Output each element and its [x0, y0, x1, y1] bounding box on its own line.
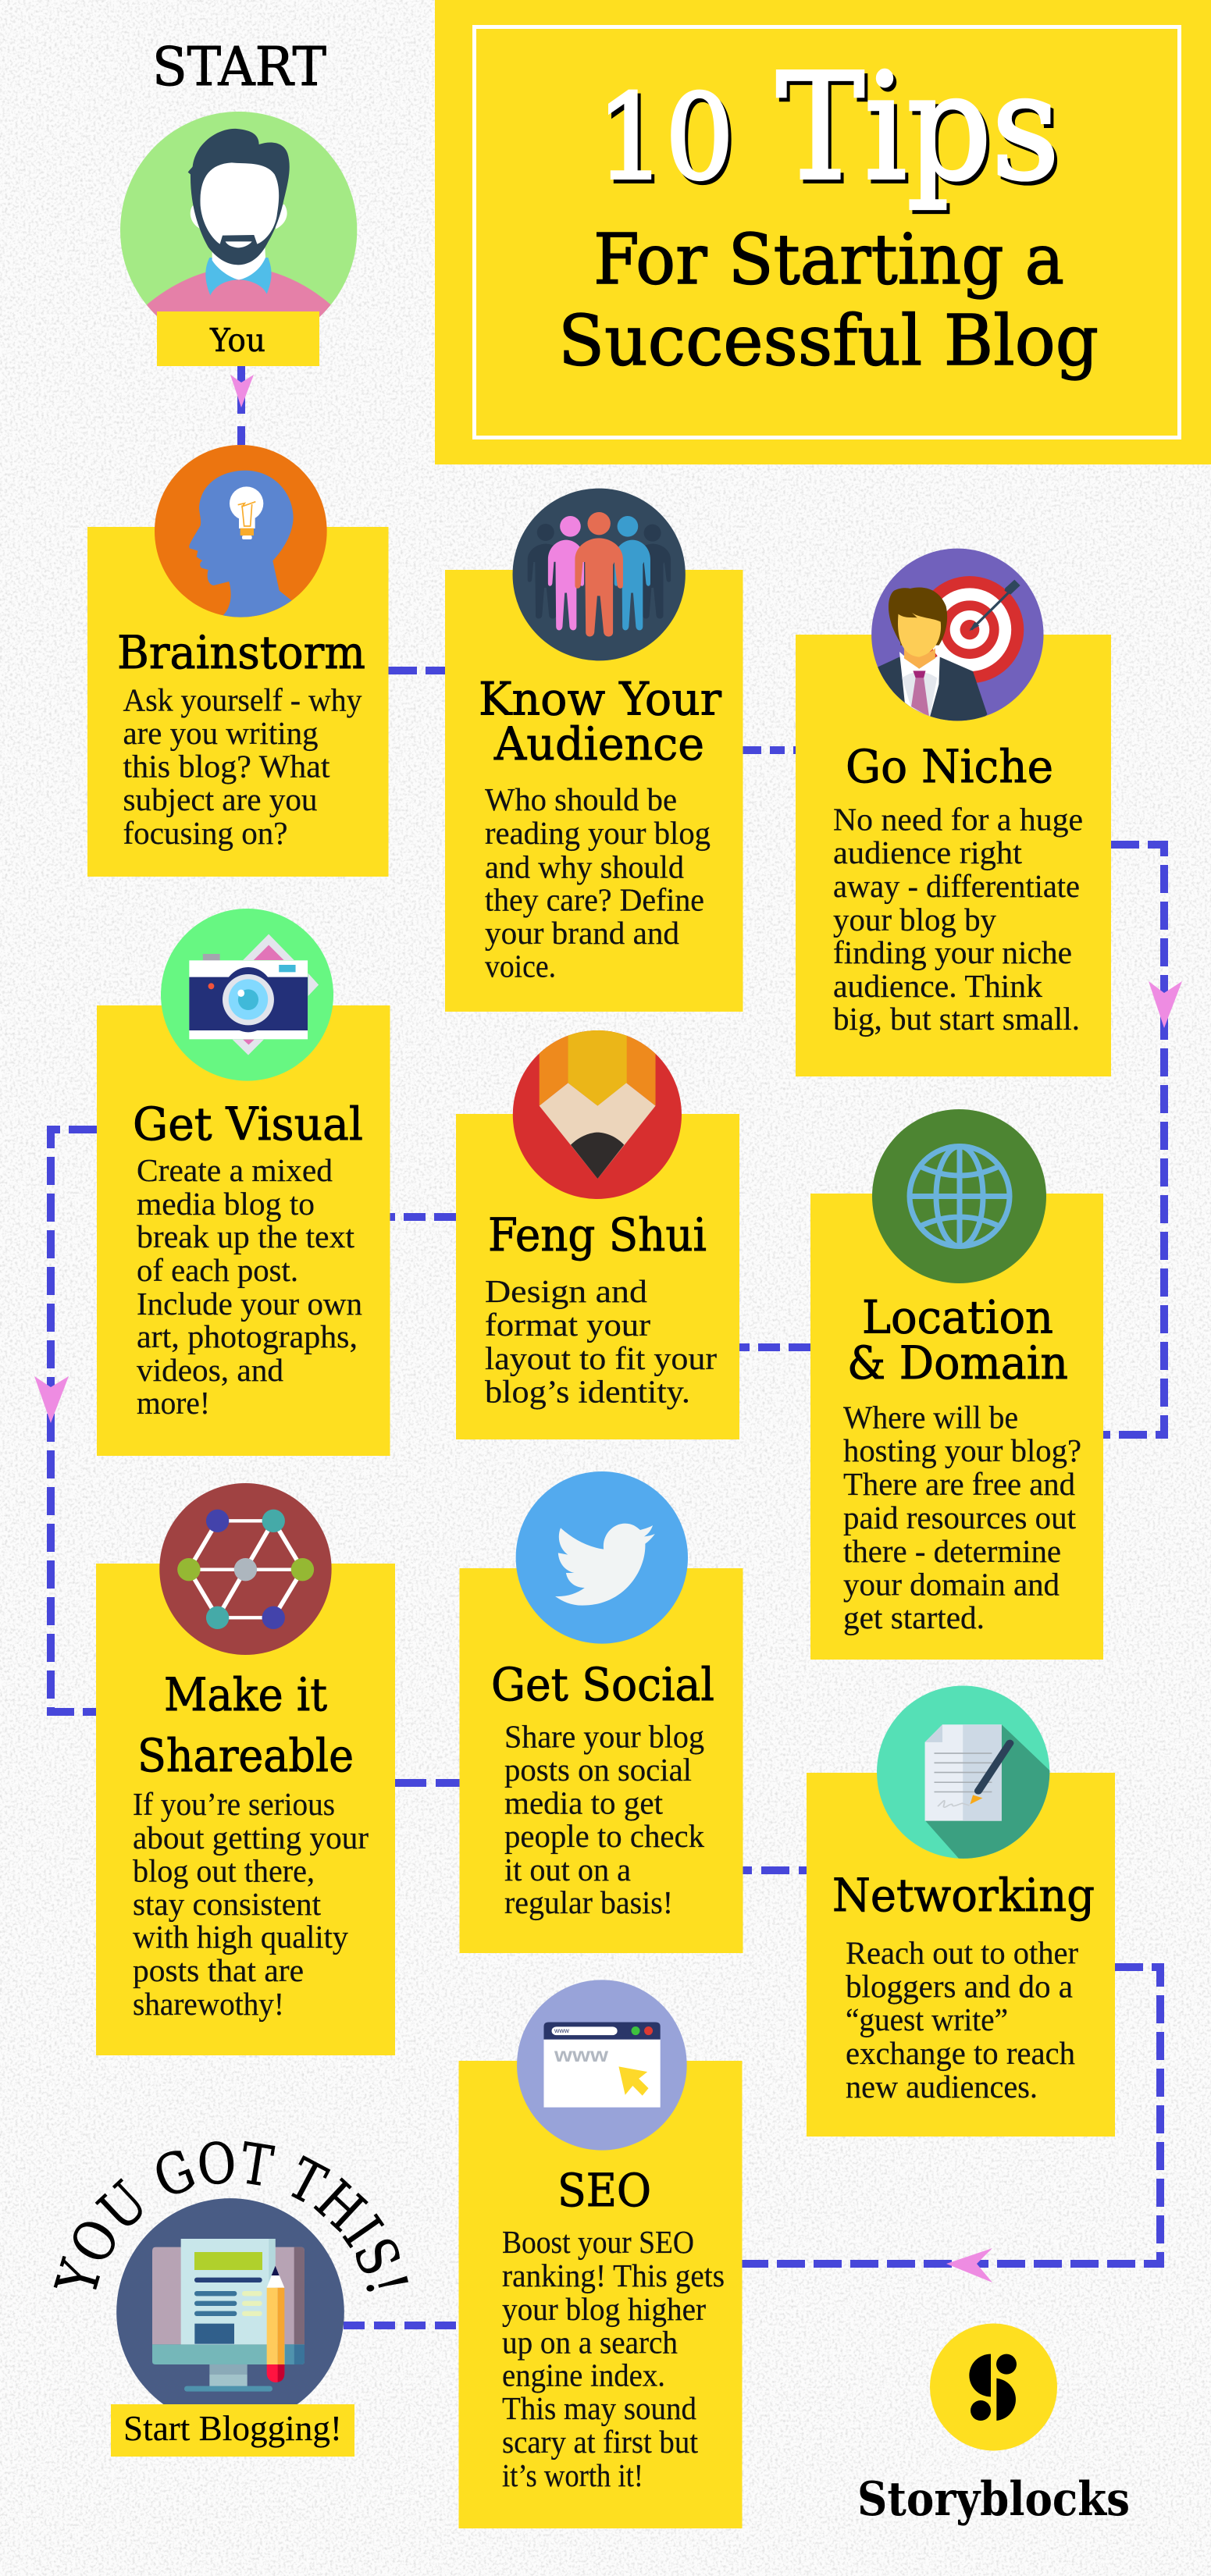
text: Shareable body: stay consistent: [133, 1886, 322, 1922]
title: 10 Tips: Tips: [776, 42, 1060, 213]
text: SEO body: your blog higher: [502, 2291, 706, 2327]
heading: Get Visual: Get Visual: [133, 1098, 363, 1151]
label box: Start Blogging: Start Blogging!: [123, 2408, 342, 2448]
text: Audience body: your brand and: [485, 915, 679, 951]
text: SEO body: [502, 2224, 725, 2493]
text: Get Social body: people to check: [504, 1818, 704, 1854]
curved heading: You got this: YOU GOT THIS!: [53, 2140, 408, 2292]
text: SEO body: engine index.: [502, 2357, 665, 2393]
panel: Get Social: [459, 1471, 743, 1953]
text: Go Niche body: audience right: [833, 834, 1023, 870]
text: Get Social body: it out on a: [504, 1852, 631, 1888]
text: Audience body: voice.: [485, 948, 556, 984]
text: Audience body: Who should be: [485, 781, 677, 817]
text: Brainstorm body: focusing on?: [123, 815, 287, 851]
panel: Go Niche: [796, 549, 1111, 1076]
text: Feng Shui body: layout to fit your: [485, 1340, 717, 1376]
heading: Get Social: Get Social: [491, 1658, 714, 1711]
icon: pencil tip: [513, 1028, 682, 1199]
text: Go Niche body: No need for a huge: [833, 801, 1083, 837]
text: Location body: paid resources out: [843, 1500, 1077, 1535]
text: Go Niche body: your blog by: [833, 902, 996, 938]
arrow: down left column: [34, 1376, 69, 1423]
text: Networking body: Reach out to other: [846, 1934, 1078, 1970]
heading: Location and Domain: Location: [862, 1291, 1053, 1344]
text: Go Niche body: finding your niche: [833, 934, 1072, 970]
text: Shareable body: sharewothy!: [133, 1986, 284, 2022]
heading: Make it Shareable: Shareable: [137, 1729, 354, 1782]
heading: Go Niche: Go Niche: [846, 740, 1053, 793]
text: SEO body: scary at first but: [502, 2424, 699, 2460]
icon: browser window: www: [554, 2027, 569, 2034]
panel: Networking: [807, 1685, 1115, 2137]
text: Go Niche body: away - differentiate: [833, 868, 1080, 904]
arrow: down right column: [1149, 981, 1182, 1028]
text: Feng Shui body: blog’s identity.: [485, 1374, 690, 1410]
text: Audience body: and why should: [485, 849, 684, 885]
text: Networking body: bloggers and do a: [846, 1969, 1073, 2005]
text: Go Niche body: audience. Think: [833, 968, 1042, 1004]
panel: Know Your Audience: [445, 489, 743, 1012]
text: Location body: your domain and: [843, 1566, 1060, 1602]
start node: You: [120, 112, 357, 366]
text: SEO body: up on a search: [502, 2325, 678, 2361]
text: Shareable body: with high quality: [133, 1919, 348, 1955]
text: Shareable body: about getting your: [133, 1820, 369, 1856]
heading: SEO: SEO: [557, 2164, 651, 2217]
text: Networking body: [846, 1934, 1078, 2105]
text: Get Visual body: art, photographs,: [137, 1318, 358, 1354]
text: Shareable body: If you’re serious: [133, 1786, 335, 1822]
icon: head with light bulb: [155, 445, 327, 624]
text: Get Visual body: videos, and: [137, 1352, 283, 1388]
panel: Brainstorm: [87, 445, 389, 877]
wordmark: Storyblocks: [857, 2472, 1130, 2527]
text: Get Social body: posts on social: [504, 1752, 692, 1788]
text: SEO body: Boost your SEO: [502, 2224, 694, 2260]
title: 10 Tips: 10: [597, 70, 734, 206]
text: Shareable body: blog out there,: [133, 1853, 315, 1889]
icon: Storyblocks badge: [930, 2323, 1057, 2450]
connector: Location to Feng Shui: [739, 1343, 810, 1351]
connector: Know Your Audience to Go Niche: [743, 746, 796, 754]
text: Brainstorm body: are you writing: [123, 715, 319, 751]
icon: camera: [161, 909, 333, 1081]
icon: businessman and target: [871, 549, 1044, 736]
text: Get Visual body: Include your own: [137, 1286, 362, 1322]
text: Audience body: they care? Define: [485, 882, 704, 918]
text: Location body: There are free and: [843, 1466, 1075, 1502]
text: SEO body: ranking! This gets: [502, 2258, 725, 2293]
icon: browser window: www: [554, 2043, 609, 2066]
text: Go Niche body: [833, 801, 1083, 1037]
icon: twitter bird: [516, 1471, 688, 1644]
text: Get Visual body: media blog to: [137, 1186, 315, 1222]
label box: You: You: [209, 322, 265, 359]
text: Get Social body: Share your blog: [504, 1719, 704, 1755]
connector: Brainstorm to Know Your Audience: [388, 667, 445, 674]
text: Brainstorm body: this blog? What: [123, 748, 330, 784]
logo: Storyblocks: [857, 2323, 1130, 2527]
text: Location body: [843, 1399, 1081, 1635]
text: Networking body: exchange to reach: [846, 2035, 1075, 2071]
panel: Make it Shareable: [96, 1483, 395, 2055]
text: Shareable body: [133, 1786, 369, 2022]
end node: Start Blogging: [111, 2198, 354, 2457]
text: Networking body: new audiences.: [846, 2069, 1038, 2105]
icon: globe: [872, 1109, 1046, 1283]
label box: Start Blogging: [111, 2404, 354, 2457]
text: SEO body: This may sound: [502, 2390, 696, 2426]
text: Get Visual body: more!: [137, 1385, 210, 1421]
title: 10 Tips: Tips: [779, 46, 1063, 217]
arrow: down to Brainstorm: [230, 375, 254, 407]
text: Location body: get started.: [843, 1599, 985, 1635]
text: Get Visual body: [137, 1152, 362, 1421]
heading: Location and Domain: & Domain: [847, 1336, 1068, 1389]
text: Location body: there - determine: [843, 1533, 1061, 1569]
text: Feng Shui body: [485, 1273, 717, 1410]
subtitle: For Starting a Successful Blog: Successful Blog: [558, 300, 1099, 381]
text: Brainstorm body: Ask yourself - why: [123, 682, 362, 718]
start heading: START: [152, 37, 326, 98]
title: 10 Tips: 10: [600, 74, 737, 210]
heading: Feng Shui: Feng Shui: [488, 1208, 707, 1261]
text: Brainstorm body: subject are you: [123, 781, 317, 817]
icon: group of people: [513, 489, 686, 660]
connector: Get Visual to Make it Shareable: [51, 1130, 97, 1712]
icon: monitor with document and pencil: [116, 2198, 344, 2426]
title panel: [435, 0, 1211, 464]
panel: SEO: [459, 1980, 742, 2528]
connector: You to Brainstorm: [237, 366, 245, 445]
label box: You: [157, 311, 319, 366]
text: SEO body: it’s worth it!: [502, 2457, 643, 2493]
heading: Networking: Networking: [832, 1869, 1095, 1922]
connector: SEO to Start Blogging: [344, 2322, 459, 2329]
panel: Location and Domain: [810, 1109, 1103, 1660]
icon: person avatar: [120, 112, 358, 317]
title: 10 Tips: [597, 42, 1063, 217]
text: Audience body: [485, 781, 711, 984]
text: Get Visual body: of each post.: [137, 1252, 298, 1288]
panel: Feng Shui: [456, 1028, 739, 1439]
subtitle: For Starting a Successful Blog: [558, 219, 1099, 381]
text: Feng Shui body: format your: [485, 1307, 650, 1343]
heading: Know Your Audience: [479, 673, 721, 770]
icon: browser window: [517, 1980, 687, 2151]
heading: Know Your Audience: Audience: [493, 717, 704, 770]
text: Get Social body: media to get: [504, 1784, 664, 1820]
heading: Location and Domain: [847, 1291, 1068, 1389]
connector: Get Social to Networking: [743, 1866, 807, 1874]
text: Networking body: “guest write”: [846, 2001, 1008, 2037]
panel: Get Visual: [97, 909, 390, 1456]
text: Location body: Where will be: [843, 1399, 1018, 1435]
connector: Go Niche to Location and Domain: [1103, 845, 1164, 1435]
connector: Make it Shareable to Get Social: [395, 1779, 460, 1787]
text: Get Visual body: break up the text: [137, 1219, 355, 1254]
arrow: left to SEO: [946, 2248, 992, 2282]
text: Feng Shui body: Design and: [485, 1273, 647, 1309]
connector: Feng Shui to Get Visual: [390, 1213, 456, 1221]
text: Get Social body: regular basis!: [504, 1884, 673, 1920]
heading: Make it Shareable: [137, 1668, 354, 1782]
icon: document and pen: [877, 1685, 1052, 1863]
text: Get Visual body: Create a mixed: [137, 1152, 333, 1188]
text: Audience body: reading your blog: [485, 815, 711, 851]
text: Go Niche body: big, but start small.: [833, 1001, 1080, 1037]
heading: Brainstorm: Brainstorm: [117, 626, 365, 679]
subtitle: For Starting a Successful Blog: For Starting a: [593, 219, 1064, 300]
text: Location body: hosting your blog?: [843, 1432, 1081, 1468]
heading: Know Your Audience: Know Your: [479, 673, 721, 726]
connector: Networking to SEO: [742, 1967, 1160, 2264]
text: Get Social body: [504, 1719, 704, 1920]
heading: Make it Shareable: Make it: [164, 1668, 327, 1721]
text: Shareable body: posts that are: [133, 1952, 304, 1988]
icon: share network: [159, 1483, 332, 1655]
text: Brainstorm body: [123, 682, 362, 851]
